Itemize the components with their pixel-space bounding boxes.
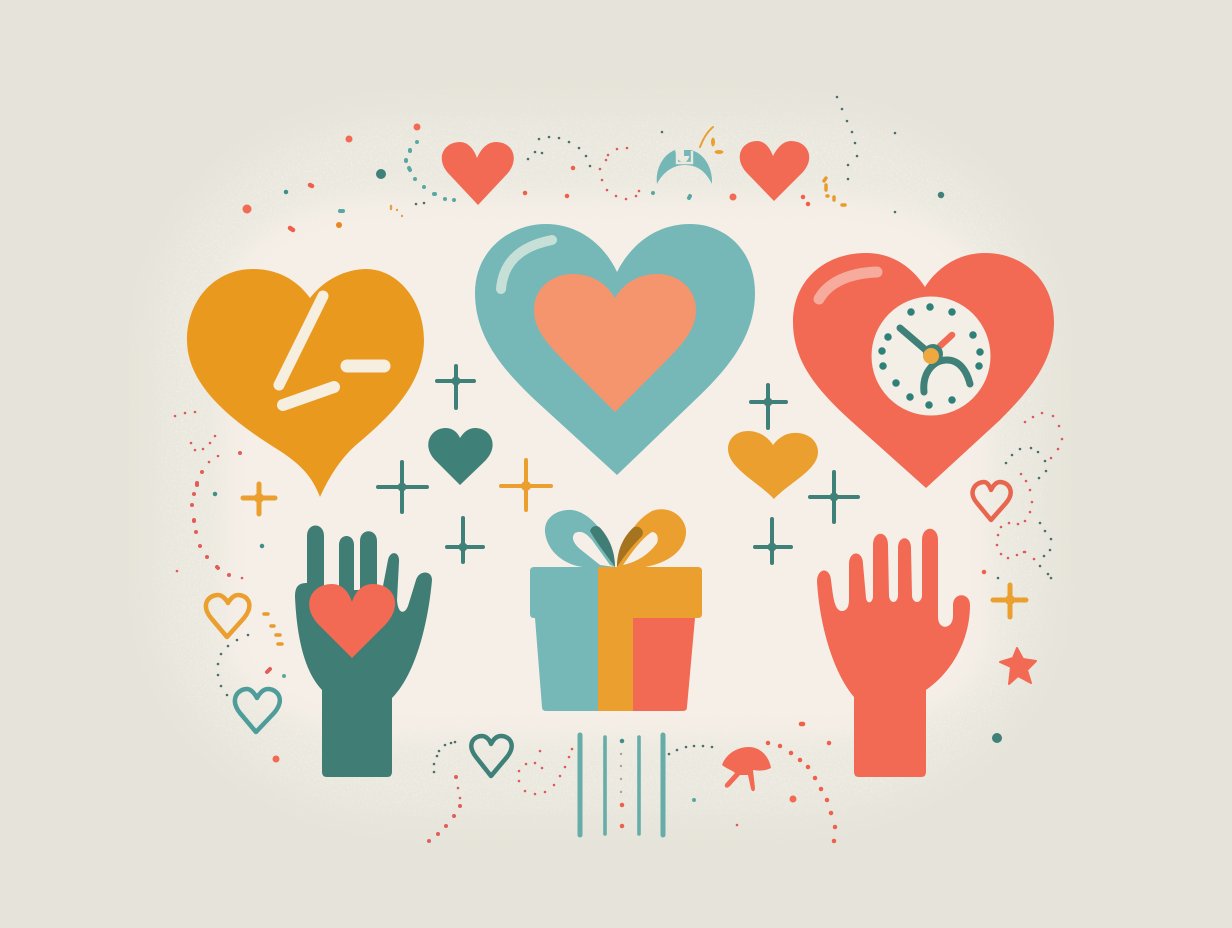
icon: red heart with clock xyxy=(793,253,1054,488)
icon: small teal heart xyxy=(428,428,493,485)
orange heart marks xyxy=(279,296,384,405)
halo speckle xyxy=(155,115,1045,815)
icon: star xyxy=(1000,648,1036,684)
icon: coral hand xyxy=(817,529,970,777)
icon: teal heart with coral heart xyxy=(475,224,755,475)
ribbon bow xyxy=(545,510,615,567)
icon: small orange heart xyxy=(728,431,818,499)
icon: teal hand with heart xyxy=(295,526,432,777)
icon: small heart top right xyxy=(740,141,809,201)
outer halo xyxy=(155,115,1045,815)
icon: small heart top left xyxy=(442,142,514,205)
vertical lines xyxy=(580,735,663,835)
confetti dots xyxy=(175,97,1062,841)
box xyxy=(535,618,598,711)
lid xyxy=(530,567,598,618)
sparkles xyxy=(243,366,1026,617)
inner coral heart xyxy=(534,274,696,412)
icon: orange speech heart xyxy=(187,269,424,497)
icon: gift box xyxy=(530,509,702,711)
highlight xyxy=(501,240,552,289)
highlight xyxy=(819,272,877,299)
icon: outline hearts xyxy=(206,482,1011,776)
clock xyxy=(872,296,990,416)
icon: mushroom xyxy=(722,747,771,791)
icon: top ring xyxy=(657,127,724,184)
inner glow xyxy=(225,198,990,736)
heart in hand xyxy=(309,584,395,658)
